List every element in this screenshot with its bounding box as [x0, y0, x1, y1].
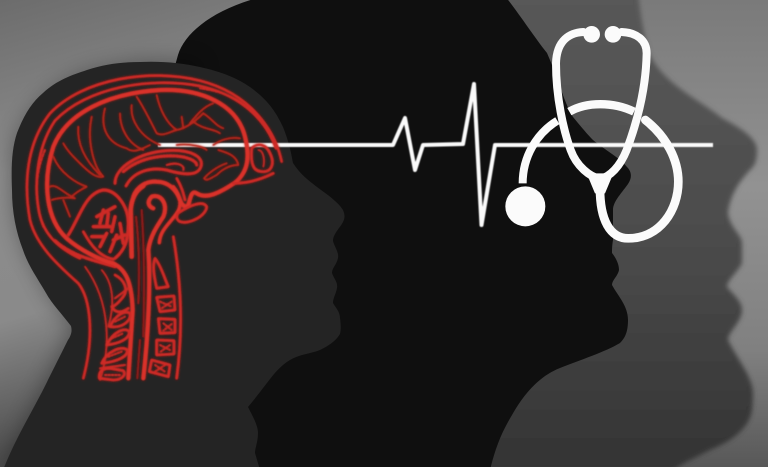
cervical vertebrae	[99, 275, 130, 380]
brain and spine anatomy	[27, 76, 282, 380]
stethoscope	[505, 26, 678, 238]
far head silhouette	[440, 0, 757, 467]
middle head silhouette	[160, 0, 631, 467]
brainstem and spinal cord	[131, 186, 180, 378]
near head shadow	[3, 60, 200, 467]
cerebellum	[68, 190, 128, 259]
near head silhouette	[3, 62, 344, 467]
cerebral folds	[50, 95, 240, 217]
cerebrum outline	[47, 90, 248, 378]
frontal sinus and pituitary	[173, 145, 273, 378]
ear tips	[583, 26, 600, 43]
corpus callosum	[115, 150, 201, 200]
skull outlines	[27, 76, 282, 380]
binaural loop	[556, 32, 647, 179]
front vertebrae	[149, 258, 175, 377]
ECG pulse line	[158, 84, 713, 225]
chest piece	[505, 186, 545, 226]
chest tube	[523, 121, 557, 183]
